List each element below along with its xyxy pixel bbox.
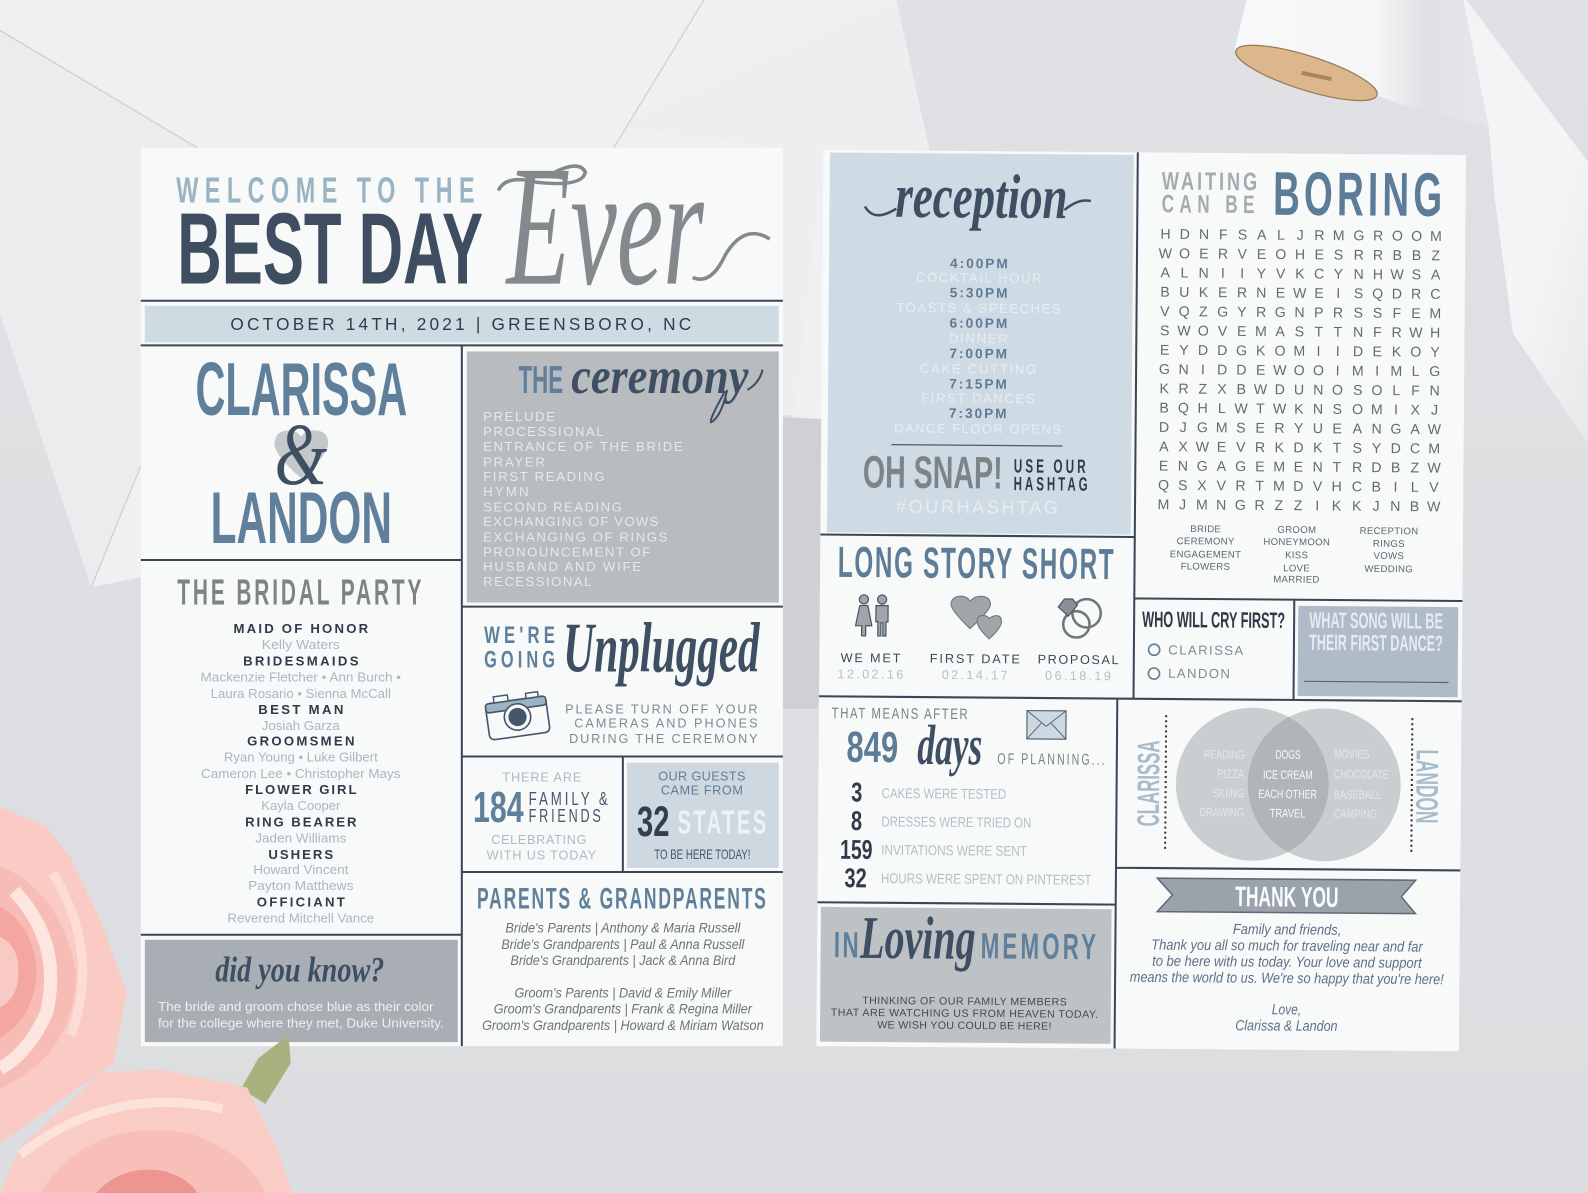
panel: unplugged: Unplugged <box>563 609 761 687</box>
planning stat rows: CAKES WERE TESTED <box>882 786 1006 803</box>
date bar <box>145 306 779 342</box>
panel: thank you <box>1129 878 1445 1036</box>
bridal party heading: THE BRIDAL PARTY <box>177 572 424 613</box>
unplugged note: PLEASE TURN OFF YOUR <box>565 702 758 716</box>
panel: bridal party <box>177 572 424 926</box>
word search grid: BQHLWTWKNSOMIXJ <box>1159 401 1438 419</box>
bridal party names: Ryan Young • Luke Gilbert <box>224 750 378 765</box>
venn labels: READING <box>1204 748 1245 762</box>
ceremony order list: RECESSIONAL <box>483 574 591 589</box>
reception schedule: FIRST DANCES <box>921 390 1035 406</box>
stat: states: OUR GUESTS <box>658 769 745 783</box>
stat: guests: FAMILY & <box>529 789 611 809</box>
bridal party names: RING BEARER <box>245 814 357 829</box>
reception schedule: CAKE CUTTING <box>920 361 1036 377</box>
venn labels: MOVIES <box>1334 747 1370 761</box>
panel: first dance question <box>1298 606 1458 697</box>
bridal party names: Kayla Cooper <box>261 798 341 813</box>
panel: who will cry first: CLARISSA <box>1168 642 1244 658</box>
ceremony order list: PRONOUNCEMENT OF <box>483 544 650 559</box>
unplugged note: DURING THE CEREMONY <box>569 732 758 746</box>
venn labels: BASEBALL <box>1334 788 1382 802</box>
word search grid: ENGAGEMENTRDBZW <box>1159 458 1441 477</box>
word search grid: AXWEVRKDKTSYDCM <box>1159 439 1440 457</box>
word search grid: QSXVRTMDVHCBILV <box>1158 478 1439 496</box>
planning stat rows <box>840 776 1093 895</box>
ceremony order list: PRELUDE <box>483 409 555 424</box>
venn labels: ICE CREAM <box>1263 768 1313 782</box>
stat: guests: FRIENDS <box>529 806 604 826</box>
planning stat rows: 159 <box>840 834 873 865</box>
panel: first dance question: WHAT SONG WILL BE <box>1309 608 1443 634</box>
venn labels: CAMPING <box>1334 807 1377 821</box>
panel: planning stats <box>830 705 1107 895</box>
thank you message: means the world to us. We're so happy that you're here! <box>1130 970 1444 988</box>
bridal party names: Payton Matthews <box>248 878 354 893</box>
reception schedule: 5:30PM <box>950 285 1008 301</box>
reception schedule: DINNER <box>949 331 1008 346</box>
hashtag callout: #OURHASHTAG <box>896 497 1058 518</box>
reception schedule: 7:30PM <box>949 406 1007 421</box>
date bar: OCTOBER 14TH, 2021 | GREENSBORO, NC <box>230 314 691 334</box>
divider lines <box>141 301 783 1046</box>
banner <box>1157 878 1416 914</box>
title best day: BEST DAY <box>177 193 483 306</box>
venn labels: SKIING <box>1213 786 1244 800</box>
thank you message: Family and friends, <box>1233 922 1341 939</box>
ceremony heading <box>519 348 763 422</box>
couple names: LANDON <box>211 478 392 559</box>
word search grid: HDNFSALJRMGROOM <box>1160 227 1442 245</box>
venn name landon: LANDON <box>1409 749 1445 824</box>
planning stat rows: 8 <box>851 805 862 836</box>
panel: planning stats: THAT MEANS AFTER <box>832 705 969 723</box>
panel: word search <box>1156 159 1447 587</box>
word search grid: VQZGYRGNPRSSFEM <box>1160 304 1441 322</box>
word list: ENGAGEMENT <box>1170 549 1241 561</box>
panel: long story short <box>837 539 1120 683</box>
icon: heart <box>274 430 328 478</box>
word list: RECEPTION <box>1360 526 1418 537</box>
panel: unplugged: GOING <box>484 646 559 673</box>
panel: planning stats: OF PLANNING... <box>997 751 1107 769</box>
icon: hearts <box>951 596 1002 639</box>
panel: first dance question: THEIR FIRST DANCE? <box>1309 630 1443 656</box>
word search grid: DJGMSERYUEANGAW <box>1159 420 1442 438</box>
word search grid: MJMNGRZZIKKJNBW <box>1157 497 1441 515</box>
bridal party names: Kelly Waters <box>262 637 340 652</box>
word search grid: BUKERNEWEISQDRC <box>1160 285 1441 303</box>
word list: MARRIED <box>1273 574 1320 586</box>
thank you message: Thank you all so much for traveling near and far <box>1151 938 1424 956</box>
divider lines <box>816 150 1466 1051</box>
planning stat rows: 3 <box>851 776 862 807</box>
ceremony order list: SECOND READING <box>483 499 622 514</box>
unplugged note <box>565 702 758 746</box>
panel: parents and grandparents: Bride's Grandparents | Paul & Anna Russell <box>501 937 745 953</box>
ceremony heading: ceremony <box>571 348 749 404</box>
word list: LOVE <box>1283 563 1310 574</box>
bridal party names: BRIDESMAIDS <box>243 653 359 668</box>
reception schedule: 7:00PM <box>949 346 1007 361</box>
word list: FLOWERS <box>1181 561 1230 573</box>
icon: couple <box>855 595 888 636</box>
stat: guests: THERE ARE <box>502 770 581 784</box>
timeline labels: PROPOSAL <box>1038 653 1119 667</box>
venn labels: PIZZA <box>1217 767 1245 781</box>
word list: KISS <box>1285 550 1308 561</box>
stat: guests: CELEBRATING <box>491 833 586 847</box>
thank you message: Clarissa & Landon <box>1235 1018 1338 1035</box>
word list <box>1170 524 1418 586</box>
title ever script: Ever <box>505 132 704 322</box>
stat: guests: WITH US TODAY <box>487 848 597 862</box>
panel: parents and grandparents: Bride's Parents | Anthony & Maria Russell <box>505 921 741 937</box>
venn labels <box>1199 746 1389 821</box>
stat: guests: 184 <box>473 784 524 832</box>
panel: did you know <box>145 940 458 1042</box>
bridal party names: Mackenzie Fletcher • Ann Burch • <box>201 670 401 685</box>
thank you message: to be here with us today. Your love and support <box>1152 954 1422 972</box>
title welcome line: WELCOME TO THE <box>176 170 481 211</box>
card 1: front page <box>141 132 783 1046</box>
word list: RINGS <box>1373 539 1405 550</box>
ceremony order list: EXCHANGING OF VOWS <box>483 514 659 529</box>
stat: states <box>627 763 779 868</box>
stat: states: STATES <box>678 804 769 841</box>
panel: did you know: did you know? <box>215 949 384 989</box>
bridal party names: Reverend Mitchell Vance <box>227 911 374 926</box>
panel: ceremony <box>467 348 779 603</box>
icon: diamond rings <box>1058 599 1101 638</box>
panel: in loving memory: THAT ARE WATCHING US FROM HEAVEN TODAY. <box>831 1007 1098 1021</box>
ceremony order list: HUSBAND AND WIFE <box>483 559 641 574</box>
envelopes <box>0 0 942 709</box>
timeline labels: 02.14.17 <box>942 668 1008 683</box>
panel: in loving memory: IN <box>834 924 861 965</box>
thank you message <box>1129 921 1444 1036</box>
ampersand: & <box>274 406 327 504</box>
word search grid: WOERVEOHESRRBBZ <box>1159 246 1440 264</box>
timeline labels: WE MET <box>841 651 901 665</box>
panel: venn diagram <box>1131 707 1445 862</box>
timeline labels: 06.18.19 <box>1045 669 1111 683</box>
panel: parents and grandparents: Groom's Grandparents | Frank & Regina Miller <box>494 1002 753 1018</box>
panel: unplugged: WE'RE <box>484 622 559 649</box>
timeline labels <box>837 651 1119 683</box>
word search grid: EYDDGKOMIIDEKOY <box>1160 343 1440 361</box>
venn name clarissa: CLARISSA <box>1131 740 1167 827</box>
bridal party names: Josiah Garza <box>262 718 340 733</box>
panel: in loving memory: THINKING OF OUR FAMILY MEMBERS <box>862 995 1067 1008</box>
ceremony order list <box>483 409 683 589</box>
word list: CEREMONY <box>1177 536 1235 548</box>
panel: who will cry first <box>1142 607 1285 682</box>
bridal party names <box>201 621 401 926</box>
reception schedule: COCKTAIL HOUR <box>916 270 1042 286</box>
bridal party names: Jaden Williams <box>255 831 347 846</box>
stat: states: CAME FROM <box>661 783 743 797</box>
panel: parents and grandparents: Groom's Parents | David & Emily Miller <box>514 986 732 1002</box>
reception schedule: TOASTS & SPEECHES <box>896 300 1061 316</box>
ceremony order list: EXCHANGING OF RINGS <box>483 529 668 544</box>
panel: word search: CAN BE <box>1162 190 1260 219</box>
panel: planning stats: 849 <box>846 724 898 772</box>
panel: word search: WAITING <box>1162 168 1260 196</box>
hashtag callout: HASHTAG <box>1014 474 1091 496</box>
ceremony order list: FIRST READING <box>483 469 605 484</box>
ceremony order list: PRAYER <box>483 454 545 469</box>
roses and leaf <box>0 807 293 1193</box>
panel: word search: BORING <box>1273 160 1447 230</box>
panel: in loving memory: MEMORY <box>981 925 1099 967</box>
planning stat rows: 32 <box>844 862 867 893</box>
panel: parents and grandparents: Groom's Grandparents | Howard & Miriam Watson <box>482 1018 764 1034</box>
stat: guests <box>473 770 611 862</box>
icon: envelope <box>1027 711 1066 739</box>
panel: reception <box>827 152 1134 535</box>
bridal party names: GROOMSMEN <box>247 733 354 748</box>
panel: who will cry first: WHO WILL CRY FIRST? <box>1142 607 1285 633</box>
bridal party names: Laura Rosario • Sienna McCall <box>211 686 391 701</box>
word list: BRIDE <box>1190 524 1221 535</box>
ceremony order list: PROCESSIONAL <box>483 424 604 439</box>
word list: WEDDING <box>1364 564 1413 575</box>
bridal party names: USHERS <box>268 847 333 862</box>
timeline labels: 12.02.16 <box>837 667 903 682</box>
couple names: CLARISSA <box>195 347 407 431</box>
timeline labels: FIRST DATE <box>930 652 1020 666</box>
bridal party names: MAID OF HONOR <box>233 621 369 636</box>
satin ribbon spool <box>1231 0 1588 444</box>
panel: parents and grandparents: Bride's Grandparents | Jack & Anna Bird <box>510 953 736 969</box>
panel: parents and grandparents: PARENTS & GRANDPARENTS <box>477 882 768 915</box>
word list: GROOM <box>1277 525 1316 536</box>
reception schedule: 6:00PM <box>950 316 1007 331</box>
panel: who will cry first: LANDON <box>1168 666 1230 681</box>
venn labels: CHOCOLATE <box>1334 767 1389 782</box>
couple names <box>195 347 407 559</box>
word list: VOWS <box>1373 551 1404 562</box>
word list: HONEYMOON <box>1263 537 1330 548</box>
venn labels: TRAVEL <box>1270 806 1306 821</box>
venn labels: EACH OTHER <box>1258 787 1317 801</box>
bridal party names: FLOWER GIRL <box>245 782 356 797</box>
venn labels: DOGS <box>1275 748 1301 762</box>
bridal party names: Howard Vincent <box>253 862 349 877</box>
reception heading: reception <box>895 161 1068 232</box>
bridal party names: BEST MAN <box>258 702 343 717</box>
panel: unplugged <box>484 609 761 746</box>
planning stat rows: HOURS WERE SPENT ON PINTEREST <box>881 871 1092 889</box>
venn labels: DRAWING <box>1199 805 1244 820</box>
bridal party names: OFFICIANT <box>257 894 345 909</box>
stat: states: 32 <box>637 798 669 846</box>
unplugged note: CAMERAS AND PHONES <box>574 717 758 731</box>
reception schedule: DANCE FLOOR OPENS <box>894 421 1061 437</box>
reception schedule: 7:15PM <box>949 376 1007 392</box>
stat: states: TO BE HERE TODAY! <box>654 847 750 862</box>
word search grid: ALNIIYVKCYNHWSA <box>1160 265 1441 284</box>
panel: long story short: LONG STORY SHORT <box>838 539 1116 589</box>
panel: in loving memory: Loving <box>859 905 976 973</box>
panel: planning stats: days <box>917 714 982 777</box>
panel: in loving memory: WE WISH YOU COULD BE HERE! <box>877 1019 1051 1033</box>
hashtag callout: OH SNAP! <box>863 446 1003 499</box>
word search grid: KRZXBWDUNOSOLFN <box>1160 381 1440 399</box>
thank you message: Love, <box>1272 1002 1301 1019</box>
bridal party names: Cameron Lee • Christopher Mays <box>201 766 401 781</box>
word search grid: SWOVEMASTTNFRWH <box>1160 323 1440 341</box>
banner text: THANK YOU <box>1235 881 1339 914</box>
hashtag callout: USE OUR <box>1014 456 1089 478</box>
reception schedule: 4:00PM <box>950 256 1008 271</box>
ceremony order list: ENTRANCE OF THE BRIDE <box>483 439 683 454</box>
planning stat rows: INVITATIONS WERE SENT <box>881 843 1027 860</box>
reception schedule <box>894 255 1063 437</box>
card 2: back page <box>816 150 1466 1051</box>
planning stat rows: DRESSES WERE TRIED ON <box>881 814 1031 832</box>
ceremony heading: THE <box>519 359 563 402</box>
word search grid: GNIDDEWOOIMIMLG <box>1159 362 1440 380</box>
panel: parents and grandparents <box>477 882 768 1034</box>
icon: camera <box>484 690 550 740</box>
panel: did you know: The bride and groom chose blue as their color <box>158 999 434 1014</box>
word search grid <box>1157 227 1443 515</box>
panel: did you know: for the college where they met, Duke University. <box>158 1015 444 1030</box>
ceremony order list: HYMN <box>483 484 529 499</box>
panel: in loving memory <box>820 905 1112 1044</box>
